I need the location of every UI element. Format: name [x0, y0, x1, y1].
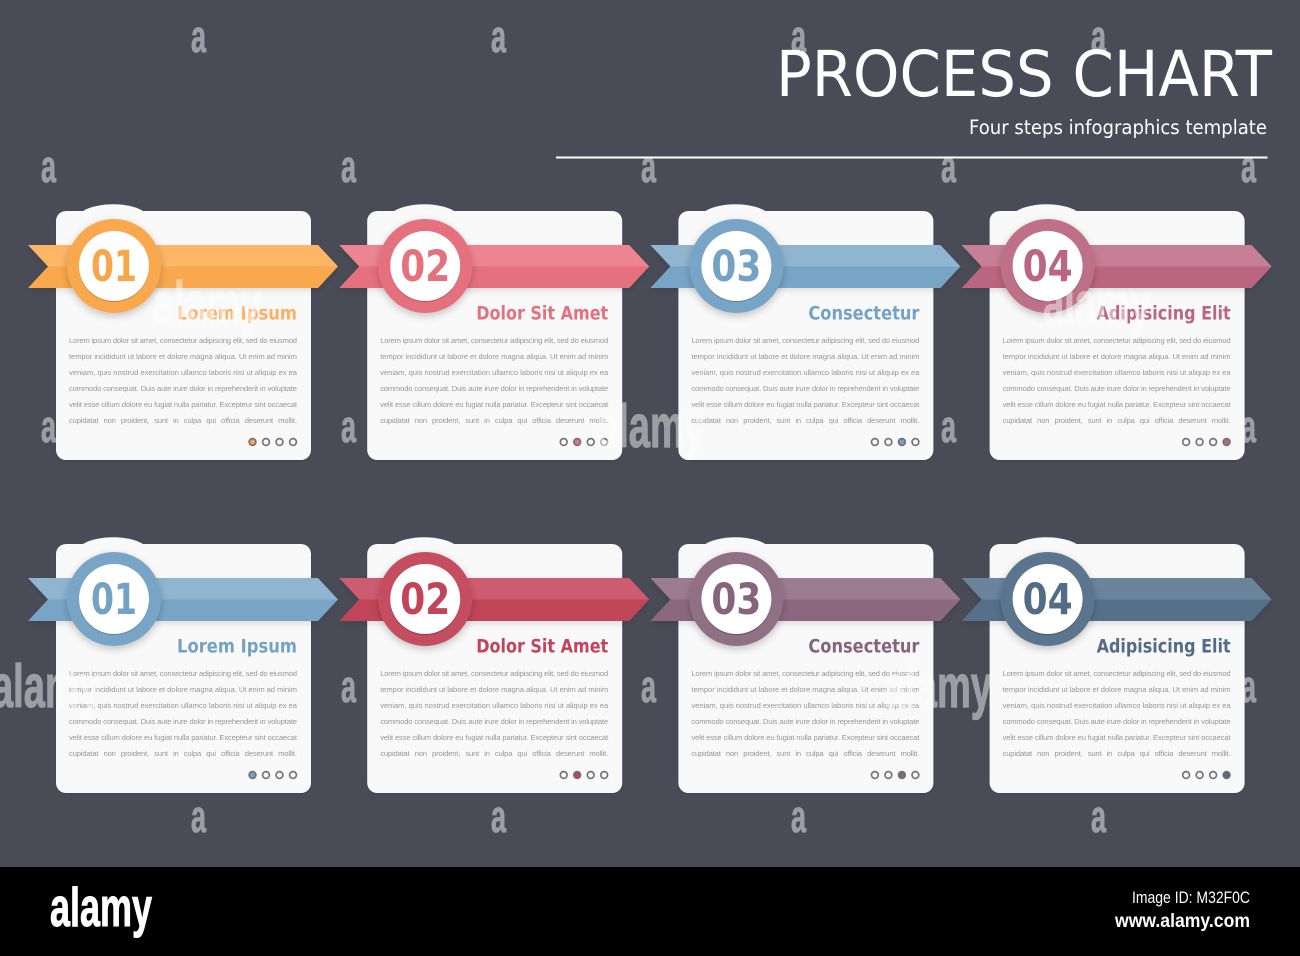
watermarks: a: [1091, 791, 1107, 842]
progress dots: [1183, 772, 1230, 778]
header rule: [556, 156, 1268, 158]
arrow ribbon: [650, 245, 960, 288]
body text: cupidatat non proident, sunt in culpa qui officia deserunt mollit.: [691, 749, 919, 758]
body text: cupidatat non proident, sunt in culpa qui officia deserunt mollit.: [1003, 416, 1231, 425]
number badge: 04: [1023, 575, 1073, 625]
body text: veniam, quis nostrud exercitation ullamco laboris nisi ut aliquip ex ea: [380, 368, 609, 377]
panel: row 1 step 02: [339, 204, 649, 460]
panel: row 2 step 03: [650, 537, 960, 793]
watermarks: a: [941, 401, 957, 452]
body text: cupidatat non proident, sunt in culpa qui officia deserunt mollit.: [380, 416, 608, 425]
progress dots: [1183, 439, 1230, 445]
watermarks: alamy: [884, 653, 992, 720]
panel: row 1 step 01: [28, 204, 338, 460]
body text: commodo consequat. Duis aute irure dolor in reprehenderit in voluptate: [1003, 717, 1231, 726]
number badge: [378, 219, 472, 313]
body text: [1003, 669, 1231, 758]
footer bar: [0, 867, 1300, 956]
arrow ribbon: [28, 578, 338, 621]
body text: cupidatat non proident, sunt in culpa qui officia deserunt mollit.: [1003, 749, 1231, 758]
heading: Adipisicing Elit: [1097, 304, 1231, 324]
body text: Lorem ipsum dolor sit amet, consectetur adipiscing elit, sed do eiusmod: [69, 336, 297, 345]
number badge: 01: [91, 575, 137, 625]
number badge: [67, 219, 161, 313]
subtitle: Four steps infographics template: [969, 116, 1267, 139]
body text: cupidatat non proident, sunt in culpa qui officia deserunt mollit.: [691, 416, 919, 425]
watermarks: a: [791, 11, 807, 62]
progress dots: [249, 772, 296, 778]
watermarks: a: [641, 141, 657, 192]
body text: veniam, quis nostrud exercitation ullamco laboris nisi ut aliquip ex ea: [69, 701, 298, 710]
watermarks: a: [41, 401, 57, 452]
footer logo: alamy: [50, 876, 152, 938]
number badge: 01: [91, 242, 137, 292]
body text: velit esse cillum dolore eu fugiat nulla pariatur. Excepteur sint occaecat: [1003, 733, 1231, 742]
body text: commodo consequat. Duis aute irure dolor in reprehenderit in voluptate: [1003, 384, 1231, 393]
number badge: 03: [711, 242, 761, 292]
panel: row 2 step 01: [28, 537, 338, 793]
body text: tempor incididunt ut labore et dolore magna aliqua. Ut enim ad minim: [380, 685, 608, 694]
body text: commodo consequat. Duis aute irure dolor in reprehenderit in voluptate: [69, 384, 297, 393]
watermarks: a: [191, 11, 207, 62]
number badge: [689, 219, 783, 313]
body text: tempor incididunt ut labore et dolore magna aliqua. Ut enim ad minim: [691, 352, 919, 361]
website: www.alamy.com: [1114, 911, 1250, 932]
body text: tempor incididunt ut labore et dolore magna aliqua. Ut enim ad minim: [691, 685, 919, 694]
body text: Lorem ipsum dolor sit amet, consectetur adipiscing elit, sed do eiusmod: [380, 336, 608, 345]
body text: Lorem ipsum dolor sit amet, consectetur adipiscing elit, sed do eiusmod: [1003, 336, 1231, 345]
body text: velit esse cillum dolore eu fugiat nulla pariatur. Excepteur sint occaecat: [380, 733, 609, 742]
heading: Consectetur: [808, 304, 920, 324]
progress dots: [872, 439, 919, 445]
watermarks: a: [41, 141, 57, 192]
body text: [1003, 336, 1231, 425]
title: PROCESS CHART: [776, 38, 1272, 111]
body text: [69, 336, 298, 425]
number badge: [378, 552, 472, 646]
body text: [380, 669, 609, 758]
watermarks: a: [341, 401, 357, 452]
arrow ribbon: [28, 245, 338, 288]
body text: commodo consequat. Duis aute irure dolor in reprehenderit in voluptate: [691, 717, 919, 726]
body text: veniam, quis nostrud exercitation ullamco laboris nisi ut aliquip ex ea: [69, 368, 298, 377]
body text: cupidatat non proident, sunt in culpa qui officia deserunt mollit.: [69, 749, 297, 758]
number badge: 02: [400, 575, 450, 625]
body text: veniam, quis nostrud exercitation ullamco laboris nisi ut aliquip ex ea: [1003, 701, 1231, 710]
body text: veniam, quis nostrud exercitation ullamco laboris nisi ut aliquip ex ea: [691, 701, 920, 710]
body text: Lorem ipsum dolor sit amet, consectetur adipiscing elit, sed do eiusmod: [69, 669, 297, 678]
number badge: [689, 552, 783, 646]
body text: [691, 336, 920, 425]
heading: Consectetur: [808, 636, 920, 658]
arrow ribbon: [650, 578, 960, 621]
body text: cupidatat non proident, sunt in culpa qui officia deserunt mollit.: [69, 416, 297, 425]
progress dots: [560, 439, 608, 445]
body text: tempor incididunt ut labore et dolore magna aliqua. Ut enim ad minim: [69, 352, 297, 361]
body text: velit esse cillum dolore eu fugiat nulla pariatur. Excepteur sint occaecat: [380, 400, 609, 409]
watermarks: alamy: [597, 393, 705, 460]
body text: veniam, quis nostrud exercitation ullamco laboris nisi ut aliquip ex ea: [1003, 368, 1231, 377]
number badge: 02: [400, 242, 450, 292]
arrow ribbon: [962, 245, 1272, 288]
watermarks: a: [191, 791, 207, 842]
number badge: [67, 552, 161, 646]
panel: row 1 step 03: [650, 204, 960, 460]
watermarks: a: [341, 661, 357, 712]
watermarks: a: [1241, 401, 1257, 452]
body text: tempor incididunt ut labore et dolore magna aliqua. Ut enim ad minim: [380, 352, 608, 361]
body text: Lorem ipsum dolor sit amet, consectetur adipiscing elit, sed do eiusmod: [1003, 669, 1231, 678]
watermarks: a: [1091, 11, 1107, 62]
heading: Adipisicing Elit: [1097, 636, 1231, 658]
panel: row 1 step 04: [962, 204, 1272, 460]
heading: Dolor Sit Amet: [476, 304, 608, 324]
watermarks: a: [1241, 141, 1257, 192]
progress dots: [872, 772, 919, 778]
panel: row 2 step 04: [962, 537, 1272, 793]
body text: commodo consequat. Duis aute irure dolor in reprehenderit in voluptate: [380, 717, 608, 726]
body text: commodo consequat. Duis aute irure dolor in reprehenderit in voluptate: [380, 384, 608, 393]
panel: row 2 step 02: [339, 537, 649, 793]
body text: velit esse cillum dolore eu fugiat nulla pariatur. Excepteur sint occaecat: [691, 400, 920, 409]
watermarks: a: [491, 11, 507, 62]
body text: velit esse cillum dolore eu fugiat nulla pariatur. Excepteur sint occaecat: [1003, 400, 1231, 409]
arrow ribbon: [962, 578, 1272, 621]
watermarks: alamy: [1043, 270, 1151, 337]
body text: [380, 336, 609, 425]
heading: Dolor Sit Amet: [476, 636, 608, 658]
number badge: [1001, 552, 1095, 646]
arrow ribbon: [339, 578, 649, 621]
body text: commodo consequat. Duis aute irure dolor in reprehenderit in voluptate: [69, 717, 297, 726]
watermarks: a: [1241, 661, 1257, 712]
watermarks: a: [791, 791, 807, 842]
body text: velit esse cillum dolore eu fugiat nulla pariatur. Excepteur sint occaecat: [691, 733, 920, 742]
body text: velit esse cillum dolore eu fugiat nulla pariatur. Excepteur sint occaecat: [69, 733, 298, 742]
body text: tempor incididunt ut labore et dolore magna aliqua. Ut enim ad minim: [69, 685, 297, 694]
body text: [69, 669, 298, 758]
body text: cupidatat non proident, sunt in culpa qui officia deserunt mollit.: [380, 749, 608, 758]
watermarks: a: [941, 141, 957, 192]
body text: tempor incididunt ut labore et dolore magna aliqua. Ut enim ad minim: [1003, 685, 1231, 694]
watermarks: alamy: [153, 270, 261, 337]
progress dots: [560, 772, 608, 778]
number badge: 04: [1023, 242, 1073, 292]
progress dots: [249, 439, 296, 445]
body text: Lorem ipsum dolor sit amet, consectetur adipiscing elit, sed do eiusmod: [691, 336, 919, 345]
image id: Image ID: M32F0C: [1132, 889, 1250, 907]
arrow ribbon: [339, 245, 649, 288]
body text: tempor incididunt ut labore et dolore magna aliqua. Ut enim ad minim: [1003, 352, 1231, 361]
watermarks: a: [641, 661, 657, 712]
body text: Lorem ipsum dolor sit amet, consectetur adipiscing elit, sed do eiusmod: [691, 669, 919, 678]
body text: [691, 669, 920, 758]
body text: commodo consequat. Duis aute irure dolor in reprehenderit in voluptate: [691, 384, 919, 393]
body text: Lorem ipsum dolor sit amet, consectetur adipiscing elit, sed do eiusmod: [380, 669, 608, 678]
body text: velit esse cillum dolore eu fugiat nulla pariatur. Excepteur sint occaecat: [69, 400, 298, 409]
body text: veniam, quis nostrud exercitation ullamco laboris nisi ut aliquip ex ea: [380, 701, 609, 710]
body text: veniam, quis nostrud exercitation ullamco laboris nisi ut aliquip ex ea: [691, 368, 920, 377]
heading: Lorem Ipsum: [177, 636, 297, 658]
watermarks: a: [341, 141, 357, 192]
heading: Lorem Ipsum: [177, 304, 297, 324]
watermarks: a: [491, 791, 507, 842]
number badge: 03: [711, 575, 761, 625]
number badge: [1001, 219, 1095, 313]
